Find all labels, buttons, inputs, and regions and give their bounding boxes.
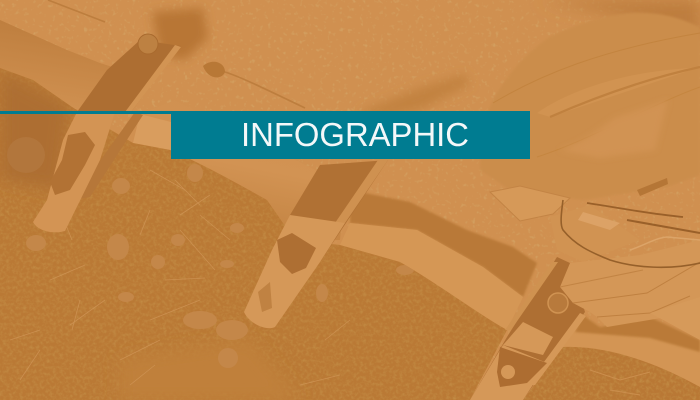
- curb shadow band, between first and second straps: [133, 100, 345, 240]
- strap 2: [244, 160, 388, 328]
- strap 3: [470, 257, 586, 400]
- hard hat: [480, 0, 700, 221]
- soil right: [524, 346, 700, 400]
- pale lower strap: [33, 112, 115, 232]
- curb shadow band, centre and right: [350, 190, 537, 297]
- strap 1: [33, 34, 181, 232]
- glove and hand: [550, 205, 700, 340]
- rule extending left: [0, 111, 171, 114]
- curb shadow band, upper left: [0, 20, 128, 118]
- title box: [171, 111, 530, 159]
- shadow stripe: [72, 112, 143, 200]
- title band: [0, 111, 530, 159]
- safety glasses: [561, 200, 700, 267]
- dark upper strap: [77, 40, 181, 112]
- drawn marks on concrete: [48, 0, 305, 108]
- bolt: [138, 34, 158, 54]
- hat visor: [490, 186, 570, 221]
- title text: INFOGRAPHIC: [241, 116, 469, 153]
- soil left: [0, 68, 507, 400]
- dry grass: [10, 170, 350, 385]
- stones: [7, 137, 414, 368]
- rust blot on lower strap: [50, 132, 95, 195]
